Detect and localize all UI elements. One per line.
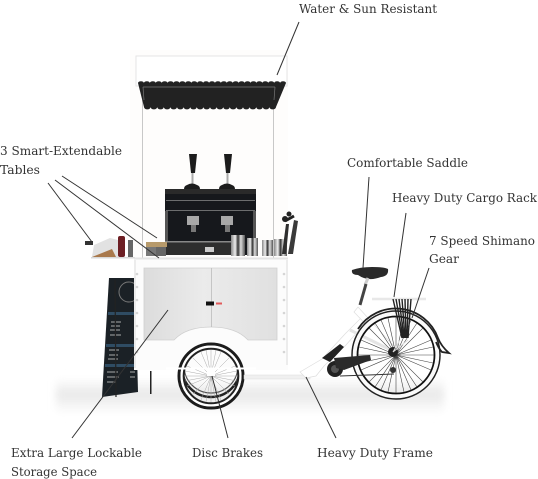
label: comfortable saddle: Comfortable Saddle bbox=[347, 156, 468, 170]
cabinet doors bbox=[144, 268, 277, 340]
front axle bar bbox=[166, 368, 256, 376]
chain and drive bbox=[322, 344, 394, 377]
label: disc brakes: Disc Brakes bbox=[192, 446, 263, 460]
cart leg bbox=[150, 371, 152, 394]
saddle bbox=[352, 267, 388, 305]
counter accessories bbox=[146, 235, 287, 256]
label: heavy duty cargo rack: Heavy Duty Cargo Rack bbox=[392, 191, 538, 205]
leader lines bbox=[48, 22, 429, 438]
group heads bbox=[187, 216, 233, 232]
extendable side table bbox=[85, 236, 135, 258]
front wheel rear bbox=[182, 366, 240, 397]
menu board bbox=[102, 278, 139, 397]
label: 7 speed shimano gear: 7 Speed Shimano bbox=[429, 234, 535, 248]
storage cabinet bbox=[134, 258, 288, 370]
label: 7 speed shimano gear: Gear bbox=[429, 252, 459, 266]
rear wheel bbox=[352, 308, 449, 399]
label: 3 smart-extendable tables bbox=[0, 144, 122, 177]
lever left bbox=[184, 154, 200, 192]
handlebar bbox=[282, 212, 298, 254]
front wheel bbox=[179, 344, 243, 408]
lever right bbox=[219, 154, 235, 192]
label: extra large lockable storage space: Extra Large Lockable bbox=[11, 446, 142, 460]
door latch bbox=[206, 302, 222, 306]
coffee machine bbox=[165, 154, 256, 255]
cargo rack bbox=[372, 299, 426, 352]
canopy frame bbox=[130, 50, 288, 260]
label: heavy duty frame: Heavy Duty Frame bbox=[317, 446, 433, 460]
label: 7 speed shimano gear bbox=[429, 234, 535, 266]
label: 3 smart-extendable tables: 3 Smart-Extendable bbox=[0, 144, 122, 158]
label: 3 smart-extendable tables: Tables bbox=[0, 163, 40, 177]
main frame bbox=[244, 307, 400, 379]
label: water and sun resistant: Water & Sun Resistant bbox=[299, 2, 437, 16]
label: extra large lockable storage space: Storage Space bbox=[11, 465, 97, 479]
awning bbox=[138, 81, 286, 109]
label: extra large lockable storage space bbox=[11, 446, 142, 479]
rivets bbox=[136, 273, 285, 353]
ground shadow bbox=[56, 378, 444, 414]
